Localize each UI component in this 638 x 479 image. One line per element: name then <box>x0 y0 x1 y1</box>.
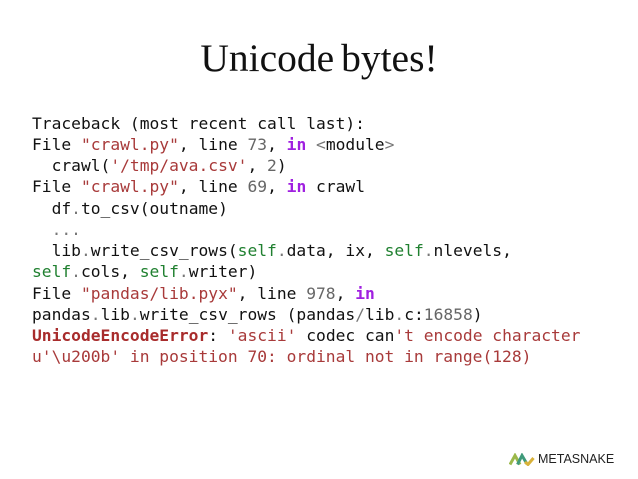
logo: Metasnake <box>509 452 614 466</box>
logo wordmark: METASNAKE <box>538 452 614 466</box>
title: Unicode bytes! <box>200 36 438 80</box>
code block: Python traceback: Traceback (most recent call last): File "crawl.py", line 73, in <module> crawl('/tmp/ava.csv', 2) File "crawl.py", line 69, in crawl df.to_csv(outname) ... lib.write_csv_rows(self.data, ix, self.nlevels, self.cols, self.writer) File "pandas/lib.pyx", line 978, in pandas.lib.write_csv_rows (pandas/lib.c:16858) UnicodeEncodeError: 'ascii' codec can't encode character u'\u200b' in position 70: ordinal not in range(128) <box>32 114 580 366</box>
icon: snake wave <box>509 453 535 466</box>
